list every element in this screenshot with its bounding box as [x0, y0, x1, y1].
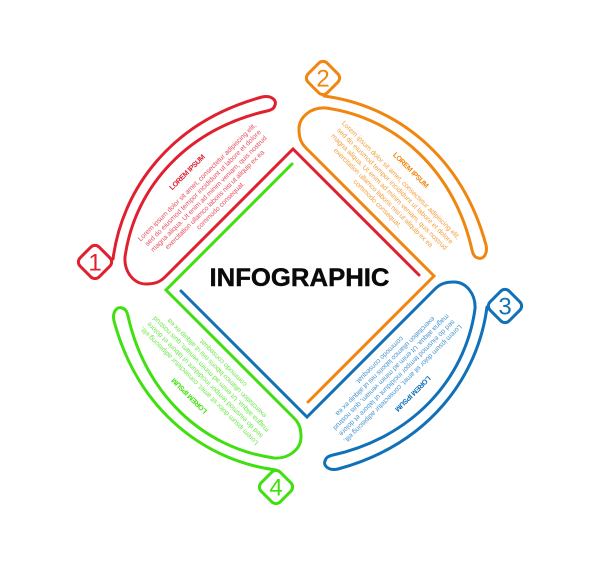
orange heading: LOREM IPSUM — [391, 150, 431, 190]
orange number badge — [304, 59, 342, 97]
blue body text: magna aliqua. Ut enim ad minim veniam, quis nostrud — [331, 312, 450, 431]
blue number badge: 3 — [498, 294, 512, 320]
green number badge: 4 — [269, 474, 283, 502]
green body text: sed do eiusmod tempor incididunt ut labore et dolore — [146, 320, 265, 439]
title: INFOGRAPHIC — [210, 264, 390, 292]
green body text: commodo consequat. — [198, 336, 248, 387]
red body text: sed do eiusmod tempor incididunt ut labore et dolore — [144, 129, 263, 248]
green body text: exercitation ullamco laboris nisi ut aliquip ex ea — [166, 317, 268, 419]
red number badge: 1 — [88, 250, 102, 276]
green heading: LOREM IPSUM — [169, 376, 209, 416]
red body text: Lorem ipsum dolor sit amet, consectetur adipiscing elit, — [137, 122, 258, 243]
orange outline — [299, 96, 486, 402]
orange body text: sed do eiusmod tempor incididunt ut labore et dolore — [335, 127, 454, 246]
red number badge — [76, 243, 114, 281]
blue body text: sed do eiusmod tempor incididunt ut labore et dolore — [337, 318, 456, 437]
blue body text: exercitation ullamco laboris nisi ut aliquip ex ea — [334, 315, 436, 417]
blue heading: LOREM IPSUM — [393, 374, 433, 414]
blue body text: commodo consequat. — [353, 335, 404, 385]
panel: step 2 orange — [299, 59, 486, 402]
green outline — [114, 164, 301, 470]
panel: step 3 blue — [181, 282, 524, 469]
green body text: Lorem ipsum dolor sit amet, consectetur adipiscing elit, — [139, 325, 260, 446]
orange body text: magna aliqua. Ut enim ad minim veniam, quis nostrud — [329, 133, 448, 252]
blue number badge — [486, 287, 524, 325]
blue body text: Lorem ipsum dolor sit amet, consectetur adipiscing elit, — [342, 323, 463, 444]
orange body text: exercitation ullamco laboris nisi ut aliquip ex ea — [332, 147, 434, 249]
panel: step 4 green — [114, 164, 301, 506]
red outline — [113, 97, 419, 284]
red body text: exercitation ullamco laboris nisi ut aliquip ex ea — [164, 149, 266, 251]
blue outline — [181, 282, 487, 469]
orange number badge: 2 — [316, 66, 330, 92]
orange body text: commodo consequat. — [352, 179, 402, 230]
green number badge — [257, 468, 295, 506]
red body text: commodo consequat. — [196, 181, 247, 231]
orange body text: Lorem ipsum dolor sit amet, consectetur adipiscing elit, — [340, 120, 461, 241]
red heading: LOREM IPSUM — [167, 152, 207, 192]
panel: step 1 red — [76, 97, 419, 284]
green body text: magna aliqua. Ut enim ad minim veniam, quis nostrud — [152, 314, 271, 433]
red body text: magna aliqua. Ut enim ad minim veniam, quis nostrud — [150, 135, 269, 254]
